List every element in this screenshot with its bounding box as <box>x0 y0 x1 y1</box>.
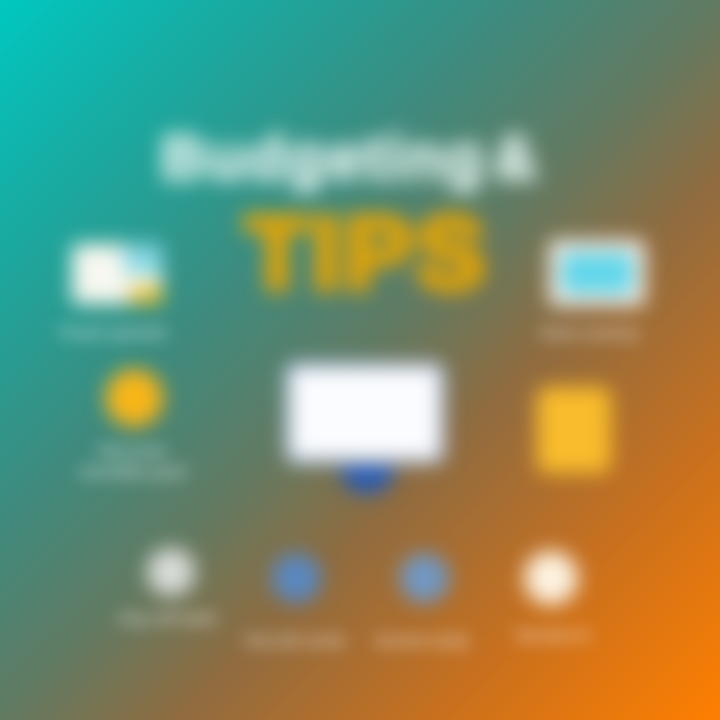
icon: yellow document <box>537 387 611 473</box>
label: bottom three: Invest early <box>376 631 469 650</box>
icon: yellow coin <box>105 369 163 427</box>
icon: blue circle one <box>271 553 321 603</box>
label: bottom one: Pay off debt <box>119 609 216 628</box>
label: bottom four: Review it <box>516 626 589 645</box>
icon: cream circle <box>524 551 578 605</box>
icon: central monitor <box>270 348 460 506</box>
icon: grey circle <box>147 548 195 596</box>
label: left middle: Set your <box>98 441 167 460</box>
label: bottom two: Cut all costs <box>244 631 346 650</box>
icon: blue circle two <box>399 553 449 603</box>
monitor screen <box>290 367 440 459</box>
label: top right: Save money <box>540 323 640 342</box>
title: Budgeting & <box>161 124 539 193</box>
heading: tips: TIPS <box>246 196 488 310</box>
label: left middle <box>76 438 190 486</box>
label: left middle: monthly goal <box>80 462 185 481</box>
label: top left: Track spends <box>58 323 167 342</box>
icon: top left card <box>72 244 162 304</box>
monitor stand <box>341 454 393 494</box>
icon: top right card <box>549 240 645 306</box>
